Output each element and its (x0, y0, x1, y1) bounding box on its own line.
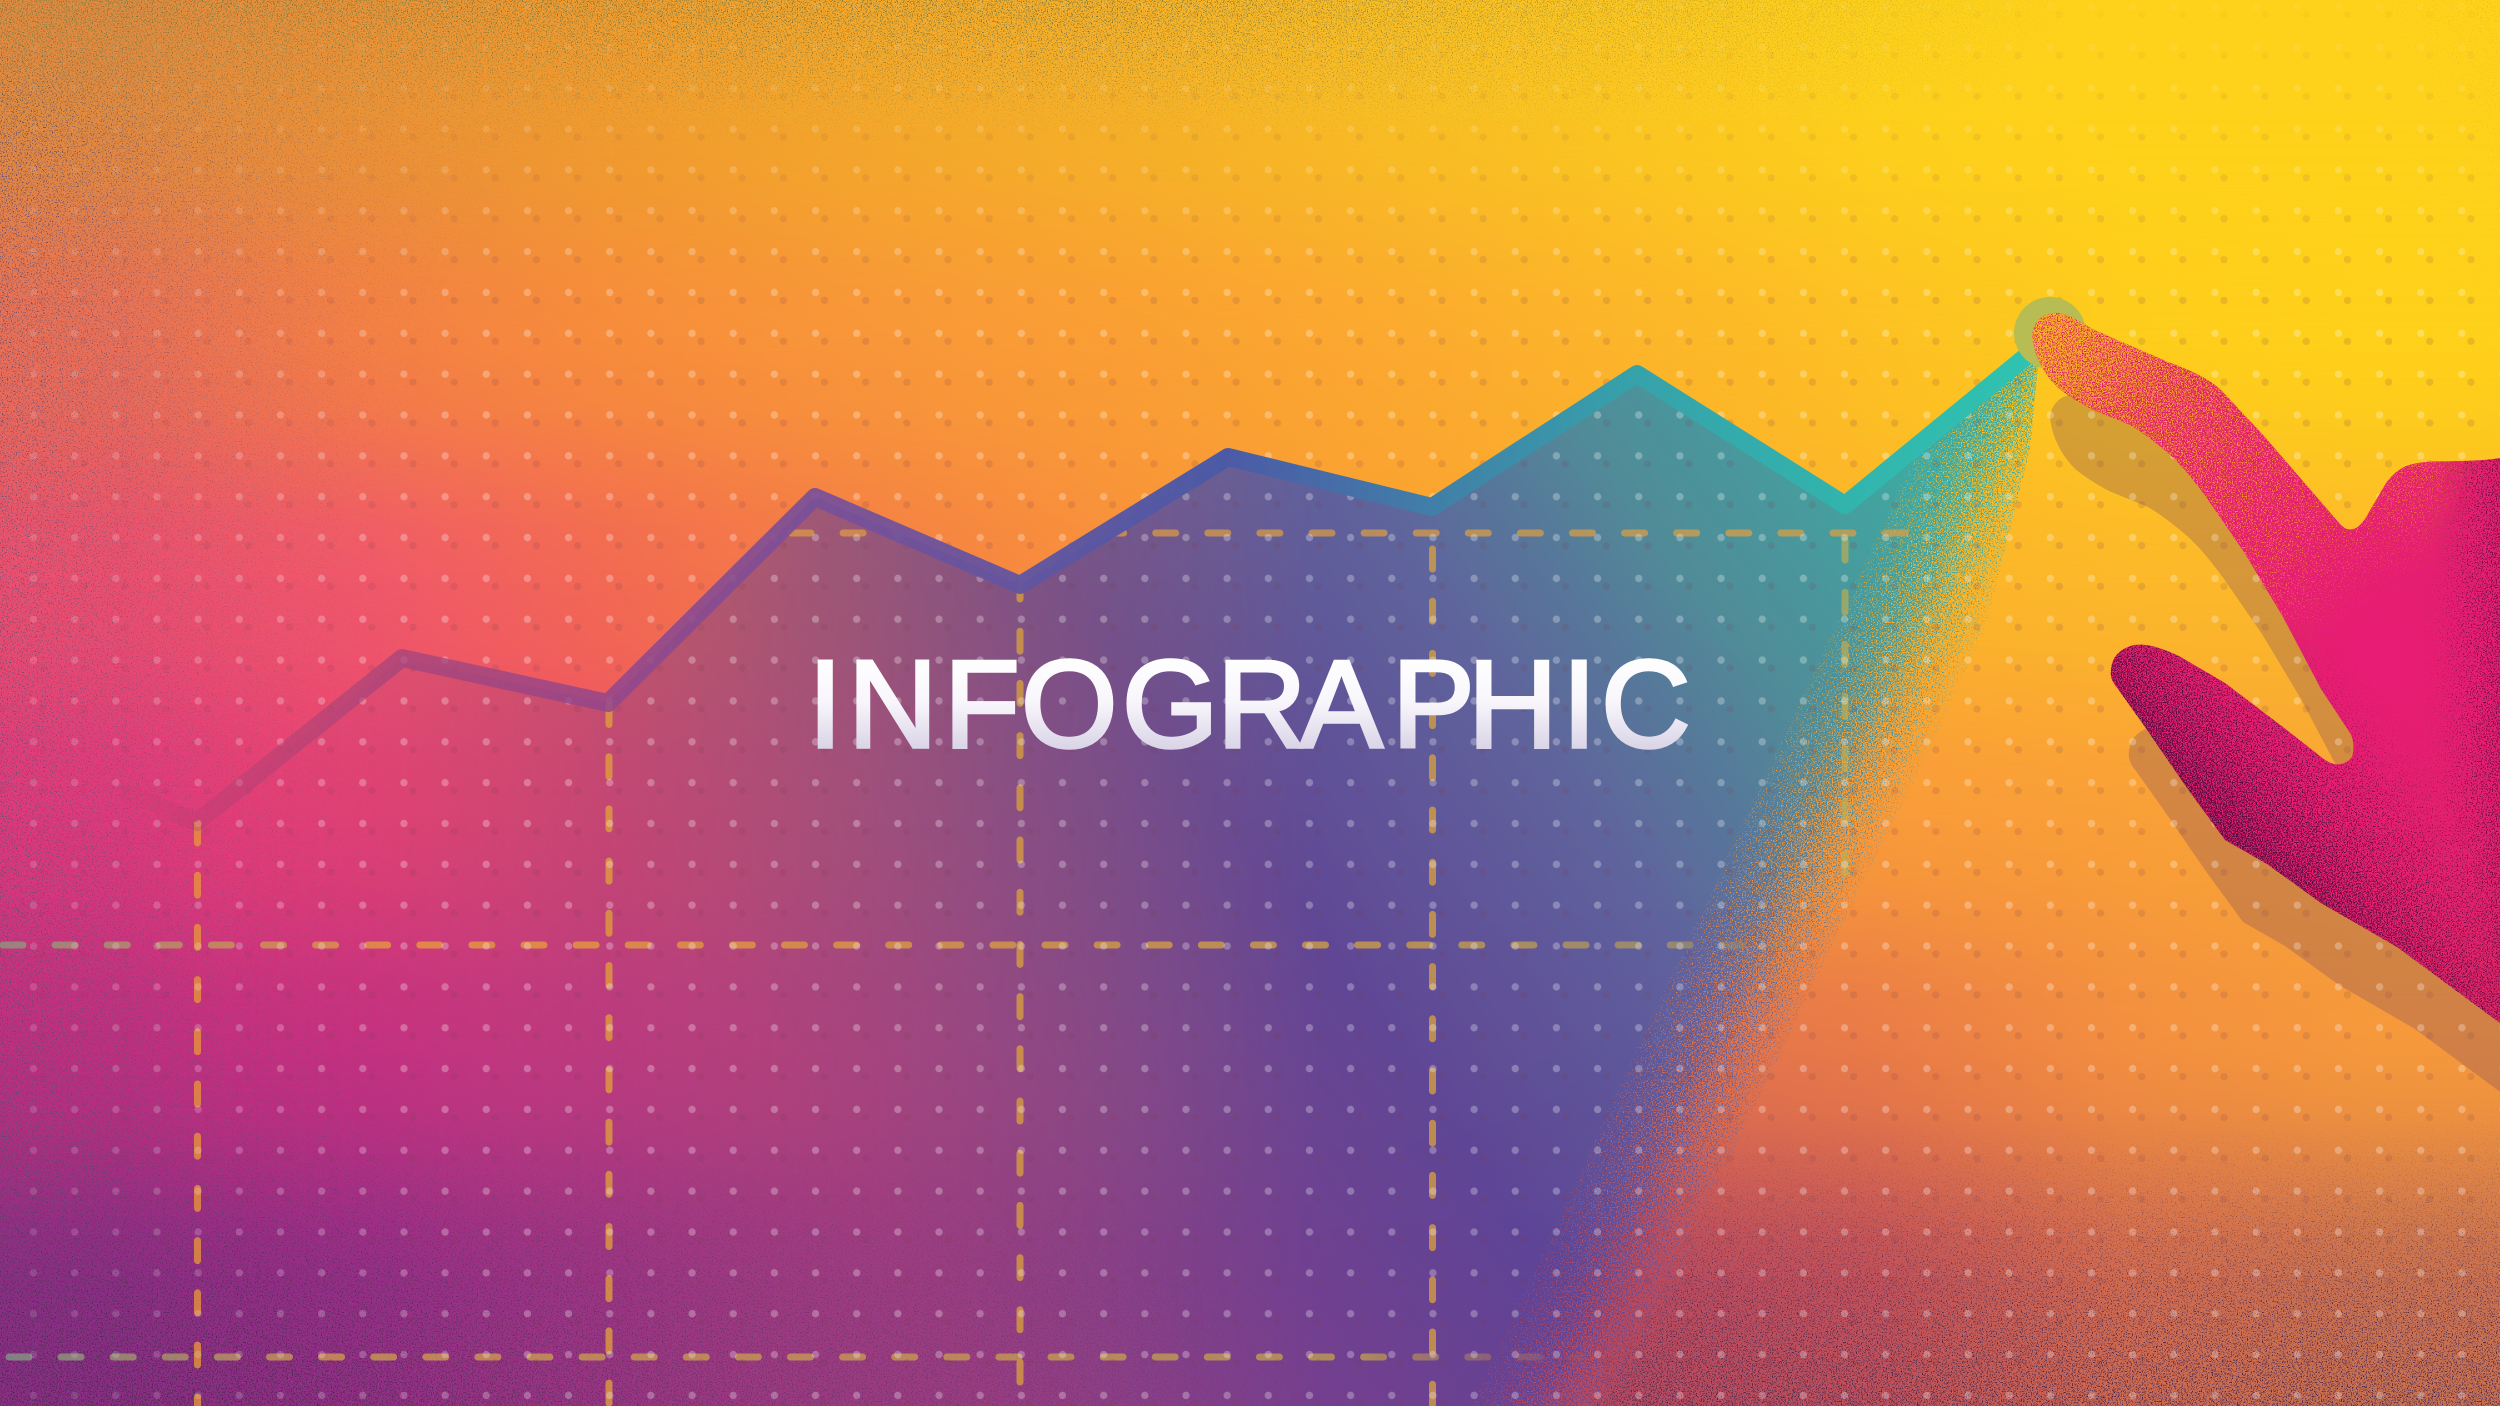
hand: back-of-hand stipple (2340, 458, 2498, 591)
fingertip glow marker (2014, 297, 2086, 369)
hand (2032, 312, 2500, 1023)
line chart (120, 345, 2040, 822)
hand shadow (2050, 395, 2500, 1105)
hand: thumb stipple (2111, 630, 2326, 684)
dashed gridlines (3, 533, 1930, 1406)
title: INFOGRAPHIC (808, 636, 1691, 774)
hand: fingertip stipple (2032, 312, 2409, 659)
hand: dark stipple (2090, 620, 2500, 1040)
chart area under line with dissolving beam (322, 364, 2038, 1406)
hand: right-edge dark stipple (2410, 450, 2500, 1040)
